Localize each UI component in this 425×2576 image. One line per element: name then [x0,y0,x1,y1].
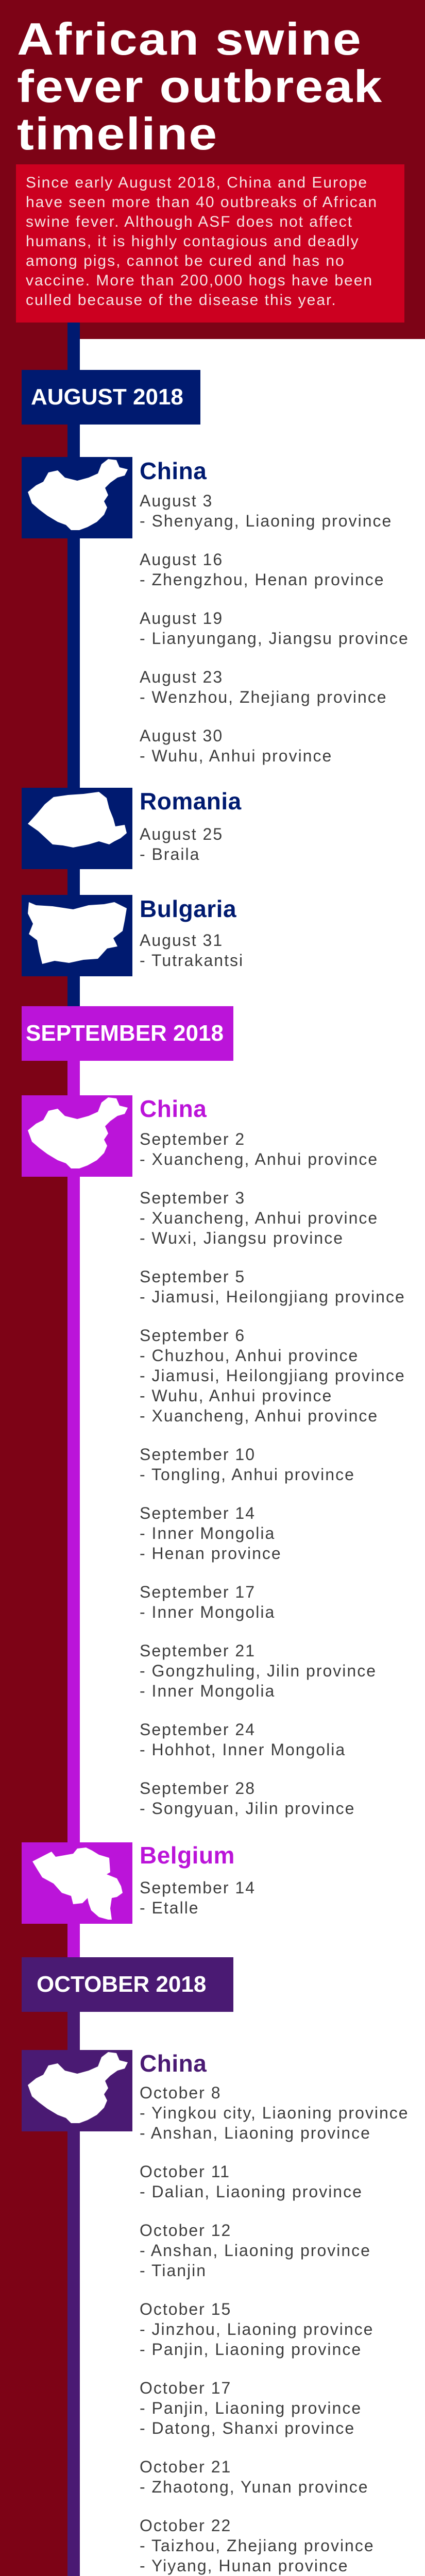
intro text box: culled because of the disease this year. [26,292,337,309]
dates: China October: October 17 [140,2379,231,2397]
dates: China September: - Wuxi, Jiangsu province [140,1229,344,1247]
dates: China October: - Taizhou, Zhejiang province [140,2536,375,2555]
intro text box: humans, it is highly contagious and deadly [26,233,360,250]
dates: China August: - Shenyang, Liaoning province [140,512,392,530]
dates: China October [140,2083,409,2575]
intro text box: have seen more than 40 outbreaks of African [26,194,378,211]
timeline line: September [67,1006,80,1957]
dates: China September: - Xuancheng, Anhui province [140,1209,378,1227]
dates: China October: - Datong, Shanxi province [140,2419,355,2437]
intro text box: Since early August 2018, China and Europe [26,174,368,191]
dates: Romania [140,825,223,863]
month header: October [22,1957,233,2012]
dates: China August: - Wuhu, Anhui province [140,747,332,765]
dates: Romania: August 25 [140,825,223,843]
dates: China September: - Hohhot, Inner Mongolia [140,1740,346,1759]
intro text box: vaccine. More than 200,000 hogs have been [26,272,373,289]
dates: China September: - Inner Mongolia [140,1524,275,1543]
dates: Bulgaria: August 31 [140,931,223,950]
title [17,13,383,159]
timeline line: October [67,1957,80,2576]
month header: October: OCTOBER 2018 [37,1972,206,1997]
icon: Romania map [22,788,132,869]
dates: China September: - Henan province [140,1544,282,1563]
month header: September: SEPTEMBER 2018 [26,1021,224,1046]
dates: China September: - Xuancheng, Anhui province [140,1406,378,1425]
dates: China October: - Jinzhou, Liaoning province [140,2320,373,2338]
intro text box [16,164,404,323]
dates: China September: - Xuancheng, Anhui province [140,1150,378,1168]
country: China (September): China [140,1095,207,1122]
dates: China September: September 3 [140,1189,245,1207]
dates: China September: - Inner Mongolia [140,1603,275,1621]
dates: China August: August 23 [140,668,223,686]
dates: China August: - Zhengzhou, Henan province [140,570,385,589]
dates: China October: October 21 [140,2458,231,2476]
timeline line: August [67,323,80,1006]
dates: China October: October 11 [140,2162,230,2181]
dates: China September [140,1130,405,1818]
dates: China September: - Songyuan, Jilin province [140,1799,355,1818]
month header: August [22,370,200,425]
icon: Bulgaria map [22,895,132,976]
title: fever outbreak [17,61,383,112]
icon: China map (September) [22,1095,132,1177]
country: Romania: Romania [140,788,242,815]
dates: China September: - Jiamusi, Heilongjiang province [140,1366,405,1385]
icon: China map (August) [22,457,132,538]
dates: China September: - Tongling, Anhui province [140,1465,355,1484]
dates: China October: - Anshan, Liaoning province [140,2124,371,2142]
country: Bulgaria: Bulgaria [140,895,236,922]
dates: China October: - Dalian, Liaoning province [140,2182,363,2201]
dates: China September: - Wuhu, Anhui province [140,1386,332,1405]
dates: China October: October 22 [140,2516,231,2535]
dates: China August: August 16 [140,550,223,569]
dates: China October: - Zhaotong, Yunan province [140,2478,369,2496]
icon: Belgium map [22,1842,132,1924]
dates: China August: August 30 [140,726,223,745]
dates: China August [140,492,409,765]
dates: China October: - Tianjin [140,2261,207,2280]
dates: Belgium: September 14 [140,1878,256,1897]
month header: August: AUGUST 2018 [31,384,183,410]
dates: China October: - Anshan, Liaoning province [140,2241,371,2260]
title: timeline [17,108,218,159]
dates: China October: October 12 [140,2221,231,2240]
dates: Romania: - Braila [140,845,200,863]
dates: China September: September 21 [140,1641,256,1660]
dates: China August: - Wenzhou, Zhejiang province [140,688,387,706]
dates: China September: September 28 [140,1779,256,1798]
dates: China August: August 19 [140,609,223,628]
dates: China September: September 2 [140,1130,245,1148]
country: China (October): China [140,2050,207,2077]
dates: China September: September 10 [140,1445,256,1464]
dates: China August: - Lianyungang, Jiangsu province [140,629,409,648]
dates: Bulgaria: - Tutrakantsi [140,951,244,970]
white timeline background [80,339,425,2576]
dates: Belgium: - Etalle [140,1899,199,1917]
dates: China September: September 17 [140,1583,256,1601]
dates: China September: - Jiamusi, Heilongjiang province [140,1287,405,1306]
dates: China September: - Chuzhou, Anhui province [140,1346,359,1365]
dates: China September: September 6 [140,1326,245,1345]
title: African swine [17,13,362,64]
dates: China August: August 3 [140,492,213,510]
dates: China September: September 5 [140,1267,245,1286]
dates: China October: October 8 [140,2083,222,2102]
dates: China October: October 15 [140,2300,231,2318]
dates: China September: September 24 [140,1720,256,1739]
month header: September [22,1006,233,1061]
dates: Bulgaria [140,931,244,970]
dates: China September: September 14 [140,1504,256,1522]
icon: China map (October) [22,2050,132,2131]
dates: China October: - Panjin, Liaoning province [140,2399,362,2417]
dates: Belgium [140,1878,256,1917]
intro text box: swine fever. Although ASF does not affect [26,213,353,230]
country: China (August): China [140,457,207,484]
dates: China September: - Inner Mongolia [140,1682,275,1700]
dates: China October: - Yingkou city, Liaoning province [140,2104,409,2122]
intro text box: among pigs, cannot be cured and has no [26,252,345,269]
dates: China September: - Gongzhuling, Jilin province [140,1662,377,1680]
dates: China October: - Panjin, Liaoning province [140,2340,362,2359]
dates: China October: - Yiyang, Hunan province [140,2556,349,2575]
country: Belgium: Belgium [140,1842,235,1869]
